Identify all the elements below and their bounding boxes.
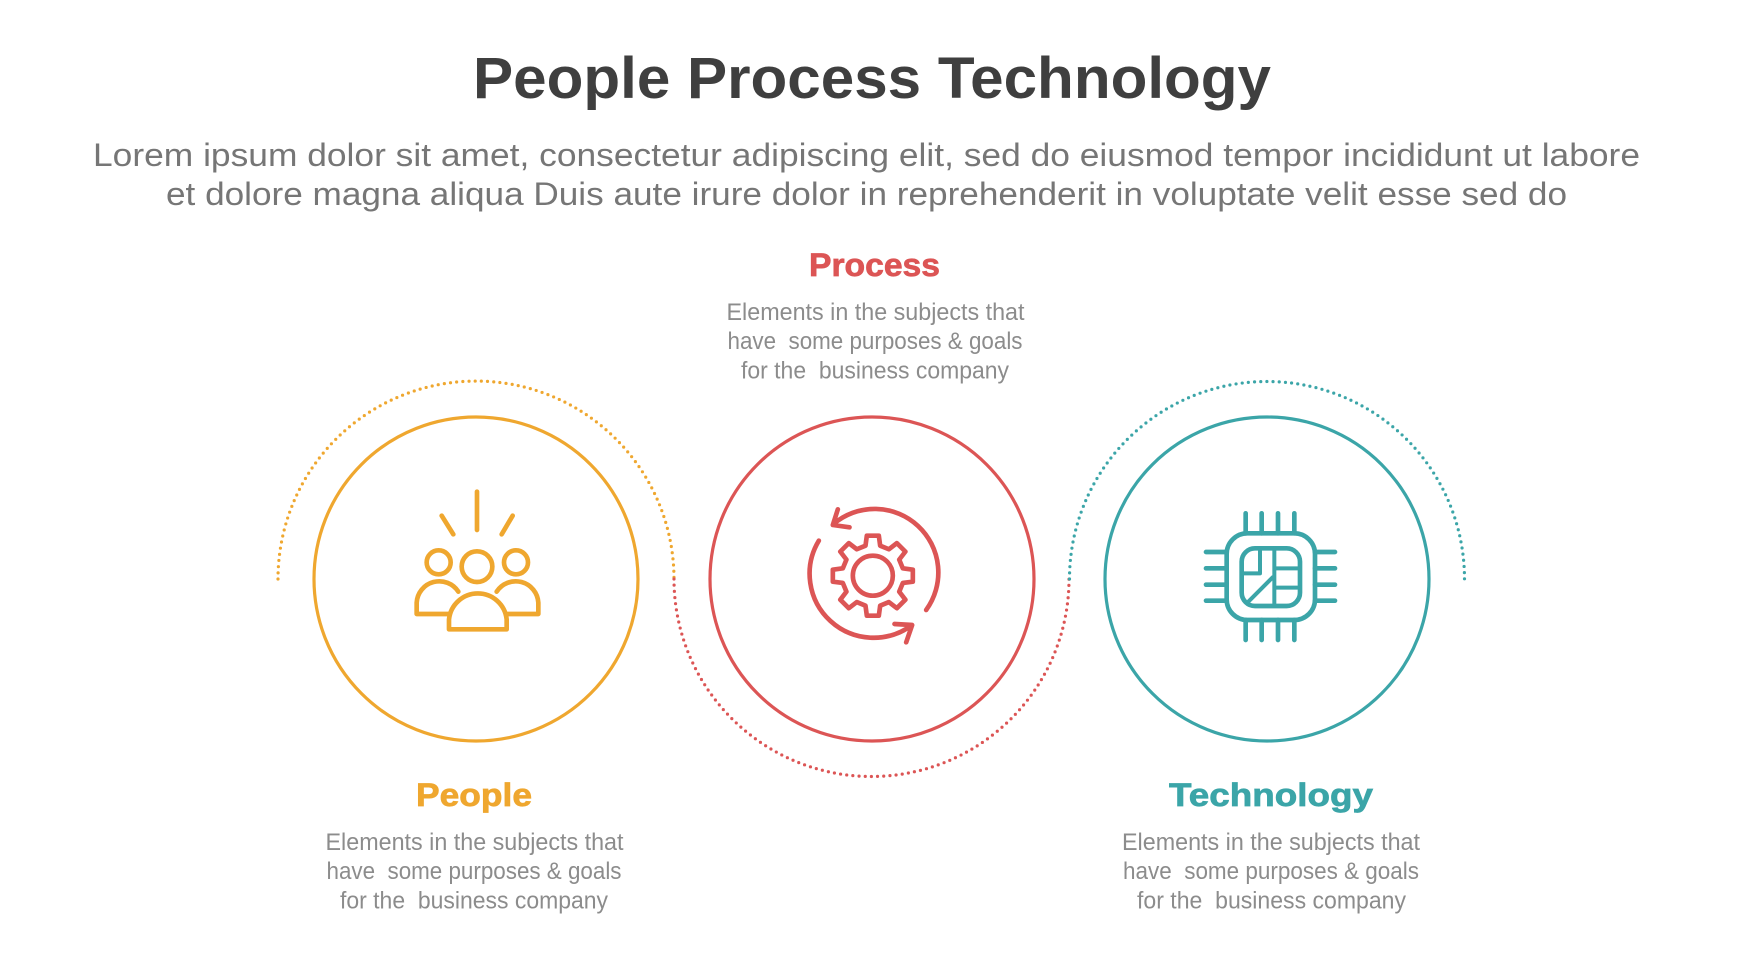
panel: process bbox=[674, 247, 1069, 776]
technology description: Elements in the subjects that bbox=[1122, 829, 1420, 856]
panel: technology bbox=[1070, 382, 1464, 914]
process label: Process bbox=[809, 247, 940, 283]
technology dotted arc bbox=[1070, 382, 1464, 579]
technology circle bbox=[1105, 417, 1429, 741]
process description: Elements in the subjects that bbox=[726, 299, 1025, 326]
icon: microchip bbox=[1206, 513, 1335, 640]
panel: people bbox=[278, 381, 674, 914]
intro text: et dolore magna aliqua Duis aute irure dolor in reprehenderit in voluptate velit esse sed do bbox=[166, 176, 1567, 212]
process circle bbox=[710, 417, 1034, 741]
people description bbox=[326, 829, 624, 914]
intro text bbox=[93, 137, 1640, 212]
intro text: Lorem ipsum dolor sit amet, consectetur adipiscing elit, sed do eiusmod tempor incididunt ut labore bbox=[93, 137, 1640, 173]
people description: for the business company bbox=[340, 888, 608, 914]
title: People Process Technology bbox=[473, 46, 1271, 111]
people dotted arc bbox=[278, 381, 674, 579]
technology description: for the business company bbox=[1137, 888, 1406, 914]
people label: People bbox=[416, 777, 532, 813]
technology description: have some purposes & goals bbox=[1123, 858, 1419, 885]
icon: gear with cycle arrows bbox=[810, 509, 938, 642]
people description: have some purposes & goals bbox=[326, 858, 622, 885]
process description bbox=[726, 299, 1025, 384]
process dotted arc bbox=[674, 579, 1069, 776]
icon: people group bbox=[417, 492, 538, 629]
people circle bbox=[314, 417, 638, 741]
technology description bbox=[1122, 829, 1420, 914]
process description: for the business company bbox=[741, 358, 1009, 384]
people description: Elements in the subjects that bbox=[326, 829, 624, 856]
process description: have some purposes & goals bbox=[728, 328, 1022, 355]
technology label: Technology bbox=[1169, 777, 1373, 813]
